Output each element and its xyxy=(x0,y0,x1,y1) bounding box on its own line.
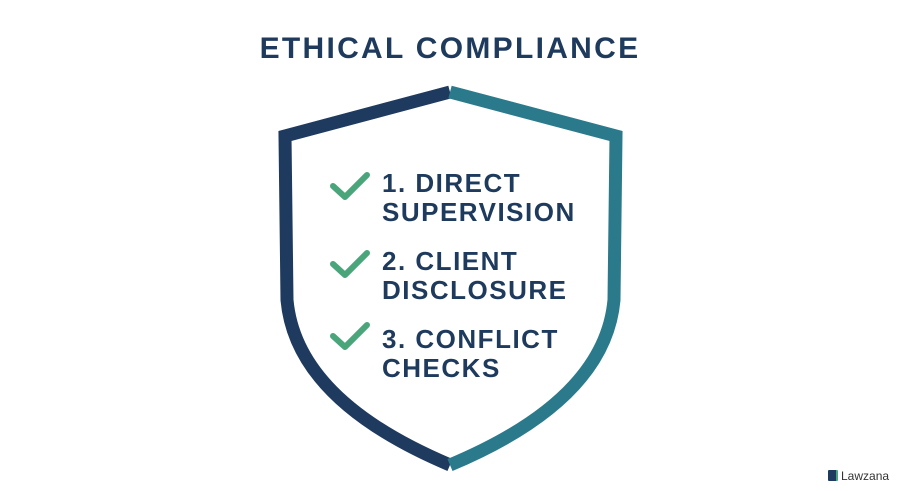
icon: check 3 xyxy=(333,325,367,347)
item 1 xyxy=(382,168,576,227)
item 3: 3. CONFLICT xyxy=(382,324,559,354)
shield right half xyxy=(450,92,616,465)
item 3 xyxy=(382,324,559,383)
item 2 xyxy=(382,246,567,305)
item 2: 2. CLIENT xyxy=(382,246,518,276)
shield left half xyxy=(285,92,450,465)
title: ETHICAL COMPLIANCE xyxy=(260,32,640,65)
logo: Lawzana xyxy=(841,469,889,483)
item 1: 1. DIRECT xyxy=(382,168,521,198)
item 3: CHECKS xyxy=(382,353,501,383)
item 1: SUPERVISION xyxy=(382,197,576,227)
icon: check 1 xyxy=(333,175,367,197)
icon: check 2 xyxy=(333,253,367,275)
item 2: DISCLOSURE xyxy=(382,275,567,305)
